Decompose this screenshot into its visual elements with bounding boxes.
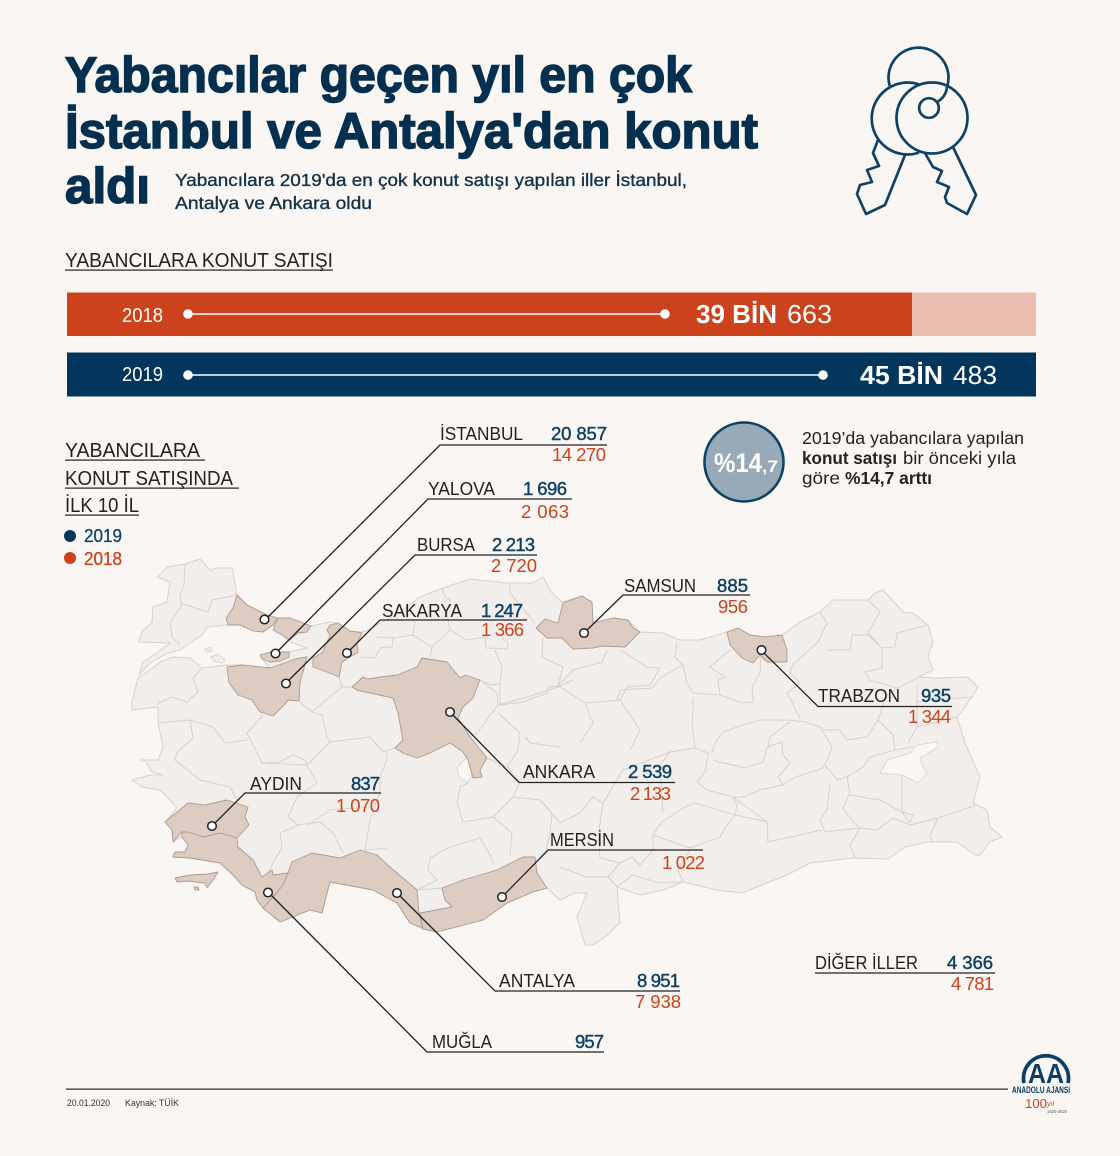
map: Aydın [165, 800, 249, 842]
map: Bursa [227, 657, 307, 716]
map: Yalova [260, 652, 289, 662]
callout: other provinces: 4 366 [947, 952, 993, 973]
map: Sakarya [313, 623, 362, 677]
title: aldı [65, 158, 150, 214]
map: Antalya [263, 850, 423, 928]
title [65, 47, 758, 214]
callout: Ankara: ANKARA [523, 761, 596, 782]
bar: 2018 [67, 292, 1036, 336]
text block: change description: 2019’da yabancılara yapılan [802, 428, 1024, 448]
callout: Trabzon: 935 [921, 685, 951, 706]
callout: Antalya [393, 889, 681, 1012]
callout: other provinces [815, 952, 995, 994]
footer: date and source: Kaynak: TÜİK [125, 1098, 180, 1109]
map: Muğla [173, 832, 288, 908]
callout: İstanbul: 20 857 [551, 423, 607, 444]
legend: 2019 [84, 526, 122, 546]
callout: Aydın: 1 070 [336, 795, 380, 816]
callout: Samsun: SAMSUN [624, 575, 696, 596]
map: Türkiye provinces [132, 559, 1002, 945]
logo: Anadolu Ajansı: 100 [1025, 1096, 1047, 1111]
map: Trabzon [727, 628, 787, 663]
callout: Trabzon [757, 646, 952, 727]
callout: Yalova: 1 696 [523, 478, 567, 499]
callout: Yalova [271, 478, 572, 658]
bar: 2019 [67, 352, 1036, 396]
callout: Mersin: 1 022 [662, 852, 705, 873]
heading: top 10 provinces: YABANCILARA [65, 440, 201, 462]
callout: Antalya: 7 938 [635, 991, 681, 1012]
callout: Samsun: 885 [717, 575, 748, 596]
map: Marmara islands [205, 647, 225, 663]
callout: Sakarya: 1 366 [481, 619, 524, 640]
callout: Antalya: 8 951 [637, 970, 680, 991]
callout: other provinces: 4 781 [951, 973, 994, 994]
callout: Yalova: 2 063 [521, 501, 569, 522]
logo: Anadolu Ajansı: AA [1028, 1058, 1064, 1089]
map: province borders [158, 564, 975, 890]
heading: foreign housing sales: YABANCILARA KONUT SATIŞI [65, 250, 333, 272]
callout: Bursa: 2 720 [491, 555, 537, 576]
callout: Ankara [446, 708, 675, 804]
map: Mersin [420, 857, 547, 932]
callout: Sakarya: 1 247 [481, 600, 523, 621]
heading: top 10 provinces: KONUT SATIŞINDA [65, 468, 234, 490]
callout: İstanbul: İSTANBUL [440, 423, 523, 444]
map: lakes [457, 742, 938, 783]
callout: Ankara: 2 539 [628, 761, 672, 782]
text block: change description: bir önceki yıla [903, 448, 1016, 468]
subtitle [175, 170, 687, 213]
callout: Muğla: MUĞLA [432, 1031, 493, 1052]
callout: Samsun [580, 575, 750, 637]
map: Bodrum and Datça peninsulas [175, 872, 218, 890]
callout: change percentage badge: ,7 [762, 457, 778, 476]
text block: change description: göre [802, 468, 840, 488]
icon: keys [857, 48, 976, 214]
bar: 2019: 2019 [122, 364, 163, 386]
callout: Trabzon: TRABZON [818, 685, 900, 706]
text block: change description: konut satışı [802, 448, 897, 468]
callout: Muğla [264, 888, 604, 1052]
callout: Yalova: YALOVA [428, 478, 496, 499]
callout: Sakarya [343, 600, 527, 657]
callout: change percentage badge: %14 [714, 448, 762, 478]
callout: Aydın: 837 [351, 773, 380, 794]
logo: Anadolu Ajansı: 1920-2020 [1047, 1109, 1067, 1114]
bar: 2019: 483 [953, 360, 997, 390]
bar: 2019: 45 BİN [860, 360, 943, 390]
logo: Anadolu Ajansı: ANADOLU AJANSI [1012, 1085, 1070, 1096]
logo: Anadolu Ajansı: yıl [1046, 1101, 1054, 1108]
callout: İstanbul [260, 423, 607, 624]
callout: Aydın: AYDIN [250, 773, 302, 794]
callout: Mersin: MERSİN [550, 829, 614, 850]
title: Yabancılar geçen yıl en çok [65, 47, 692, 103]
title: İstanbul ve Antalya'dan konut [65, 103, 758, 159]
callout: change percentage badge [704, 422, 784, 502]
text block: change description: %14,7 arttı [845, 468, 932, 488]
callout: Bursa: BURSA [417, 534, 476, 555]
footer: date and source [66, 1088, 1008, 1109]
map: İstanbul [226, 595, 311, 640]
bar: 2018: 663 [787, 299, 832, 329]
callout: other provinces: DİĞER İLLER [815, 952, 918, 973]
heading: top 10 provinces: İLK 10 İL [65, 494, 139, 517]
heading: top 10 provinces [65, 440, 239, 517]
legend: 2018 [84, 549, 122, 569]
callout: Ankara: 2 133 [630, 783, 671, 804]
bar: 2018: 39 BİN [696, 299, 777, 329]
callout: Bursa: 2 213 [492, 534, 535, 555]
subtitle: Yabancılara 2019'da en çok konut satışı yapılan iller İstanbul, [175, 170, 687, 190]
logo: Anadolu Ajansı [1012, 1056, 1070, 1114]
map: Samsun [536, 596, 640, 649]
subtitle: Antalya ve Ankara oldu [175, 193, 372, 213]
callout: Muğla: 957 [575, 1031, 604, 1052]
text block: change description [802, 428, 1024, 488]
callout: Sakarya: SAKARYA [382, 600, 463, 621]
bar: 2018: 2018 [122, 305, 163, 327]
callout: Mersin [498, 829, 705, 901]
callout: Aydın [208, 773, 381, 830]
callout: İstanbul: 14 270 [552, 444, 606, 465]
callout: Trabzon: 1 344 [908, 706, 951, 727]
footer: date and source: 20.01.2020 [67, 1098, 110, 1109]
callout: Antalya: ANTALYA [499, 970, 576, 991]
legend [64, 526, 122, 569]
map: Ankara [352, 658, 487, 778]
callout: Bursa [282, 534, 537, 688]
callout: Samsun: 956 [718, 596, 748, 617]
